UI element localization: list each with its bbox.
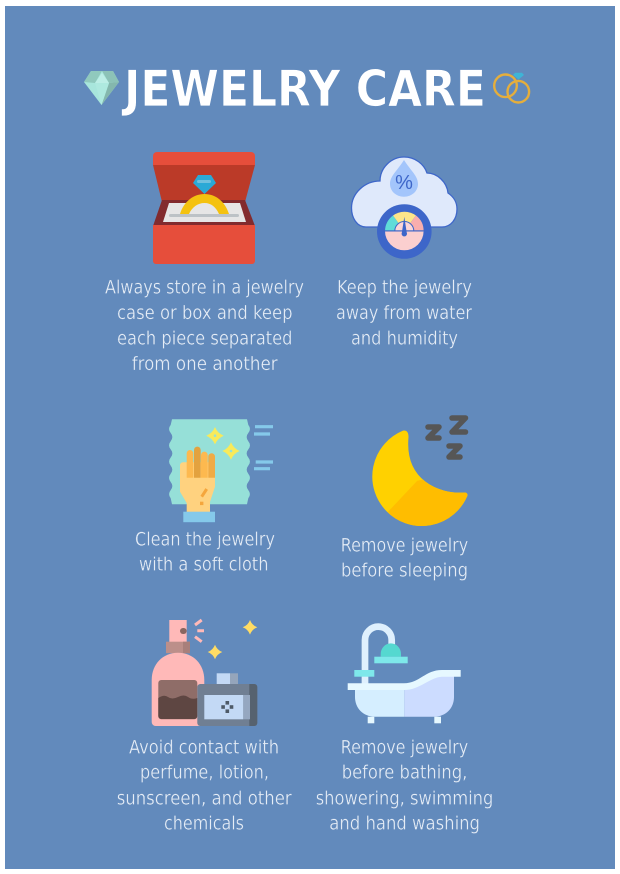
text: store in a case [105,278,304,375]
text: avoid chemicals [117,737,292,835]
text: remove before bathing: and hand washing [329,814,480,835]
text: store in a case: each piece separated [117,329,292,350]
title: JEWELRY CARE [121,60,486,118]
text: remove before bathing [316,737,493,835]
text: remove before sleeping: Remove jewelry [341,536,468,557]
text: remove before bathing: Remove jewelry [341,737,468,758]
icon: crescent moon and sleep letters [375,418,466,524]
text: avoid chemicals: Avoid contact with [129,737,279,758]
text: avoid chemicals: sunscreen, and other [117,788,292,809]
text: keep away from water: away from water [336,303,472,324]
text: keep away from water: and humidity [351,329,458,350]
icon: humidity cloud and gauge: % [395,172,413,194]
text: remove before bathing: showering, swimming [316,788,493,809]
icon: humidity cloud and gauge [352,157,457,259]
text: clean with soft cloth: with a soft cloth [139,555,268,576]
text: clean with soft cloth [135,530,275,576]
text: avoid chemicals: perfume, lotion, [140,763,269,784]
text: remove before sleeping [341,536,468,582]
text: clean with soft cloth: Clean the jewelry [135,530,275,551]
text: keep away from water: Keep the jewelry [337,278,472,299]
text: remove before bathing: before bathing, [342,763,467,784]
icon: diamond [84,71,119,105]
text: avoid chemicals: chemicals [164,814,244,835]
icon: jewelry box [153,152,255,264]
icon: wedding rings [494,73,529,102]
icon: polishing cloth and hand [169,419,273,522]
text: store in a case: from one another [132,354,278,375]
text: store in a case: case or box and keep [117,303,292,324]
icon: perfume and lotion [152,620,257,726]
text: remove before sleeping: before sleeping [341,561,468,582]
text: keep away from water [336,278,472,350]
text: store in a case: Always store in a jewelry [105,278,304,299]
icon: bathtub and shower [348,627,461,723]
